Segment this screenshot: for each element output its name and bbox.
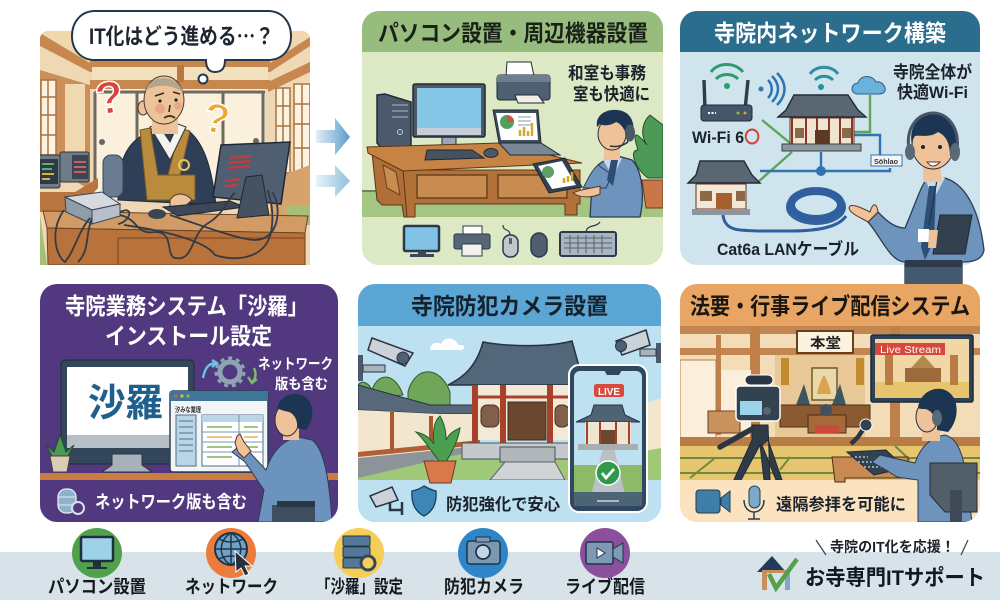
icon: wireless mouse <box>531 233 547 257</box>
footer icon: PC <box>72 528 122 578</box>
panel: monk unsure about IT <box>34 11 310 265</box>
icon: red question mark: ? <box>92 70 127 125</box>
panel: Sara business system <box>40 284 338 522</box>
desk <box>43 211 308 265</box>
footer icon: security camera <box>458 528 508 578</box>
brand logo icon <box>757 556 797 590</box>
back office monitors <box>34 152 98 212</box>
icon: shield <box>412 486 436 516</box>
text: all rooms comfortable: 室も快適に <box>573 85 650 104</box>
small temple <box>688 161 760 215</box>
icon: monitor <box>404 226 439 257</box>
heading: PC installation: パソコン設置・周辺機器設置 <box>378 20 648 46</box>
footer label: network: ネットワーク <box>185 577 278 597</box>
grass and trees <box>358 372 661 480</box>
app window: 汐みな業理 <box>175 405 201 414</box>
sign: main hall <box>797 331 853 353</box>
icon: microphone <box>744 486 764 519</box>
text: all rooms comfortable <box>568 64 650 104</box>
operator with mixer and microphone <box>832 389 977 522</box>
icon: database with gear <box>58 489 84 514</box>
panel: temple network <box>680 11 984 285</box>
icon: gear with arrows <box>203 358 257 386</box>
panel: security cameras <box>358 284 661 522</box>
security camera: left <box>358 338 413 381</box>
app window <box>170 391 268 472</box>
text: network edition note: 版も含む <box>275 375 328 393</box>
sign: main hall: 本堂 <box>810 335 841 351</box>
potted plant <box>633 115 663 208</box>
icon: printer <box>454 226 490 256</box>
phone with live view <box>569 365 647 512</box>
plant <box>46 435 74 472</box>
heading: Sara installation <box>65 293 308 349</box>
brand text: Sara: 沙羅 <box>88 383 163 425</box>
LAN cable coil <box>723 190 846 231</box>
panel: live streaming <box>680 284 980 522</box>
desktop monitor <box>413 84 485 149</box>
text: peace of mind: 防犯強化で安心 <box>446 494 560 514</box>
tangled cables <box>55 190 278 262</box>
heading: temple network: 寺院内ネットワーク構築 <box>714 20 946 46</box>
text: Live Stream: Live Stream <box>880 345 941 356</box>
text: network edition note <box>258 356 333 393</box>
router with wifi <box>701 64 784 121</box>
desktop monitor <box>61 360 194 472</box>
text: includes network version: ネットワーク版も含む <box>95 492 247 512</box>
icon: cloud <box>852 76 885 94</box>
tower PC <box>377 94 411 152</box>
text: Cat6a cable: Cat6a LANケーブル <box>717 239 859 259</box>
hall interior <box>680 326 980 482</box>
printer <box>497 62 550 103</box>
desk shelf <box>40 473 338 480</box>
switch box <box>871 155 902 166</box>
bubble text: IT化はどう進める…？ <box>89 19 274 51</box>
monitor <box>213 142 290 218</box>
icon: keyboard <box>560 222 616 256</box>
desk <box>367 143 582 217</box>
footer icon: Sara settings <box>334 528 384 578</box>
computer box <box>65 192 120 224</box>
heading: Sara installation: インストール設定 <box>105 323 272 349</box>
brand tagline: 寺院のIT化を応援！ <box>830 539 955 556</box>
brand name: お寺専門ITサポート <box>805 566 985 590</box>
text: all rooms comfortable: 和室も事務 <box>568 64 646 83</box>
temple hall <box>448 341 592 480</box>
LIVE badge: LIVE <box>598 387 620 398</box>
monk figure <box>103 76 216 207</box>
text: whole temple wifi <box>893 62 972 102</box>
heading: security cameras: 寺院防犯カメラ設置 <box>411 293 608 319</box>
keyboard and mouse <box>148 201 245 219</box>
footer label: PC: パソコン設置 <box>48 577 146 597</box>
keyboard and mouse <box>425 148 498 160</box>
potted plant <box>416 416 460 483</box>
text: Wi-Fi 6: Wi-Fi 6〇 <box>692 128 760 147</box>
footer icon: network <box>206 528 256 578</box>
icon: mouse <box>503 225 518 257</box>
text: network edition note: ネットワーク <box>258 356 333 373</box>
text: remote worship: 遠隔参拝を可能に <box>776 494 906 514</box>
icon: orange question mark: ? <box>199 93 234 144</box>
laptop <box>493 110 560 155</box>
panel: PC installation <box>362 11 663 265</box>
arrow: lower <box>316 165 350 197</box>
arrow: upper <box>316 118 350 155</box>
text: whole temple wifi: 快適Wi-Fi <box>897 83 968 102</box>
heading: Sara installation: 寺院業務システム「沙羅」 <box>65 293 308 319</box>
main temple <box>778 67 866 151</box>
small camera <box>370 487 402 515</box>
switch box: Söhlao <box>874 159 898 166</box>
tablet and technician <box>533 110 642 217</box>
footer label: live stream: ライブ配信 <box>565 576 645 597</box>
camera on tripod <box>720 375 782 482</box>
temple wall <box>358 385 661 478</box>
technician with tablet <box>849 113 984 285</box>
footer label: security camera: 防犯カメラ <box>444 577 524 597</box>
speech bubble <box>72 11 291 84</box>
security camera: right <box>616 330 661 363</box>
text: whole temple wifi: 寺院全体が <box>893 62 972 82</box>
icon: cloud <box>430 338 464 350</box>
footer label: Sara settings: 「沙羅」設定 <box>316 577 403 597</box>
footer icon: live stream <box>580 528 630 578</box>
live stream screen <box>871 335 973 402</box>
network lines <box>758 95 890 182</box>
icon: video camera <box>696 490 730 513</box>
technician pointing <box>232 394 332 522</box>
